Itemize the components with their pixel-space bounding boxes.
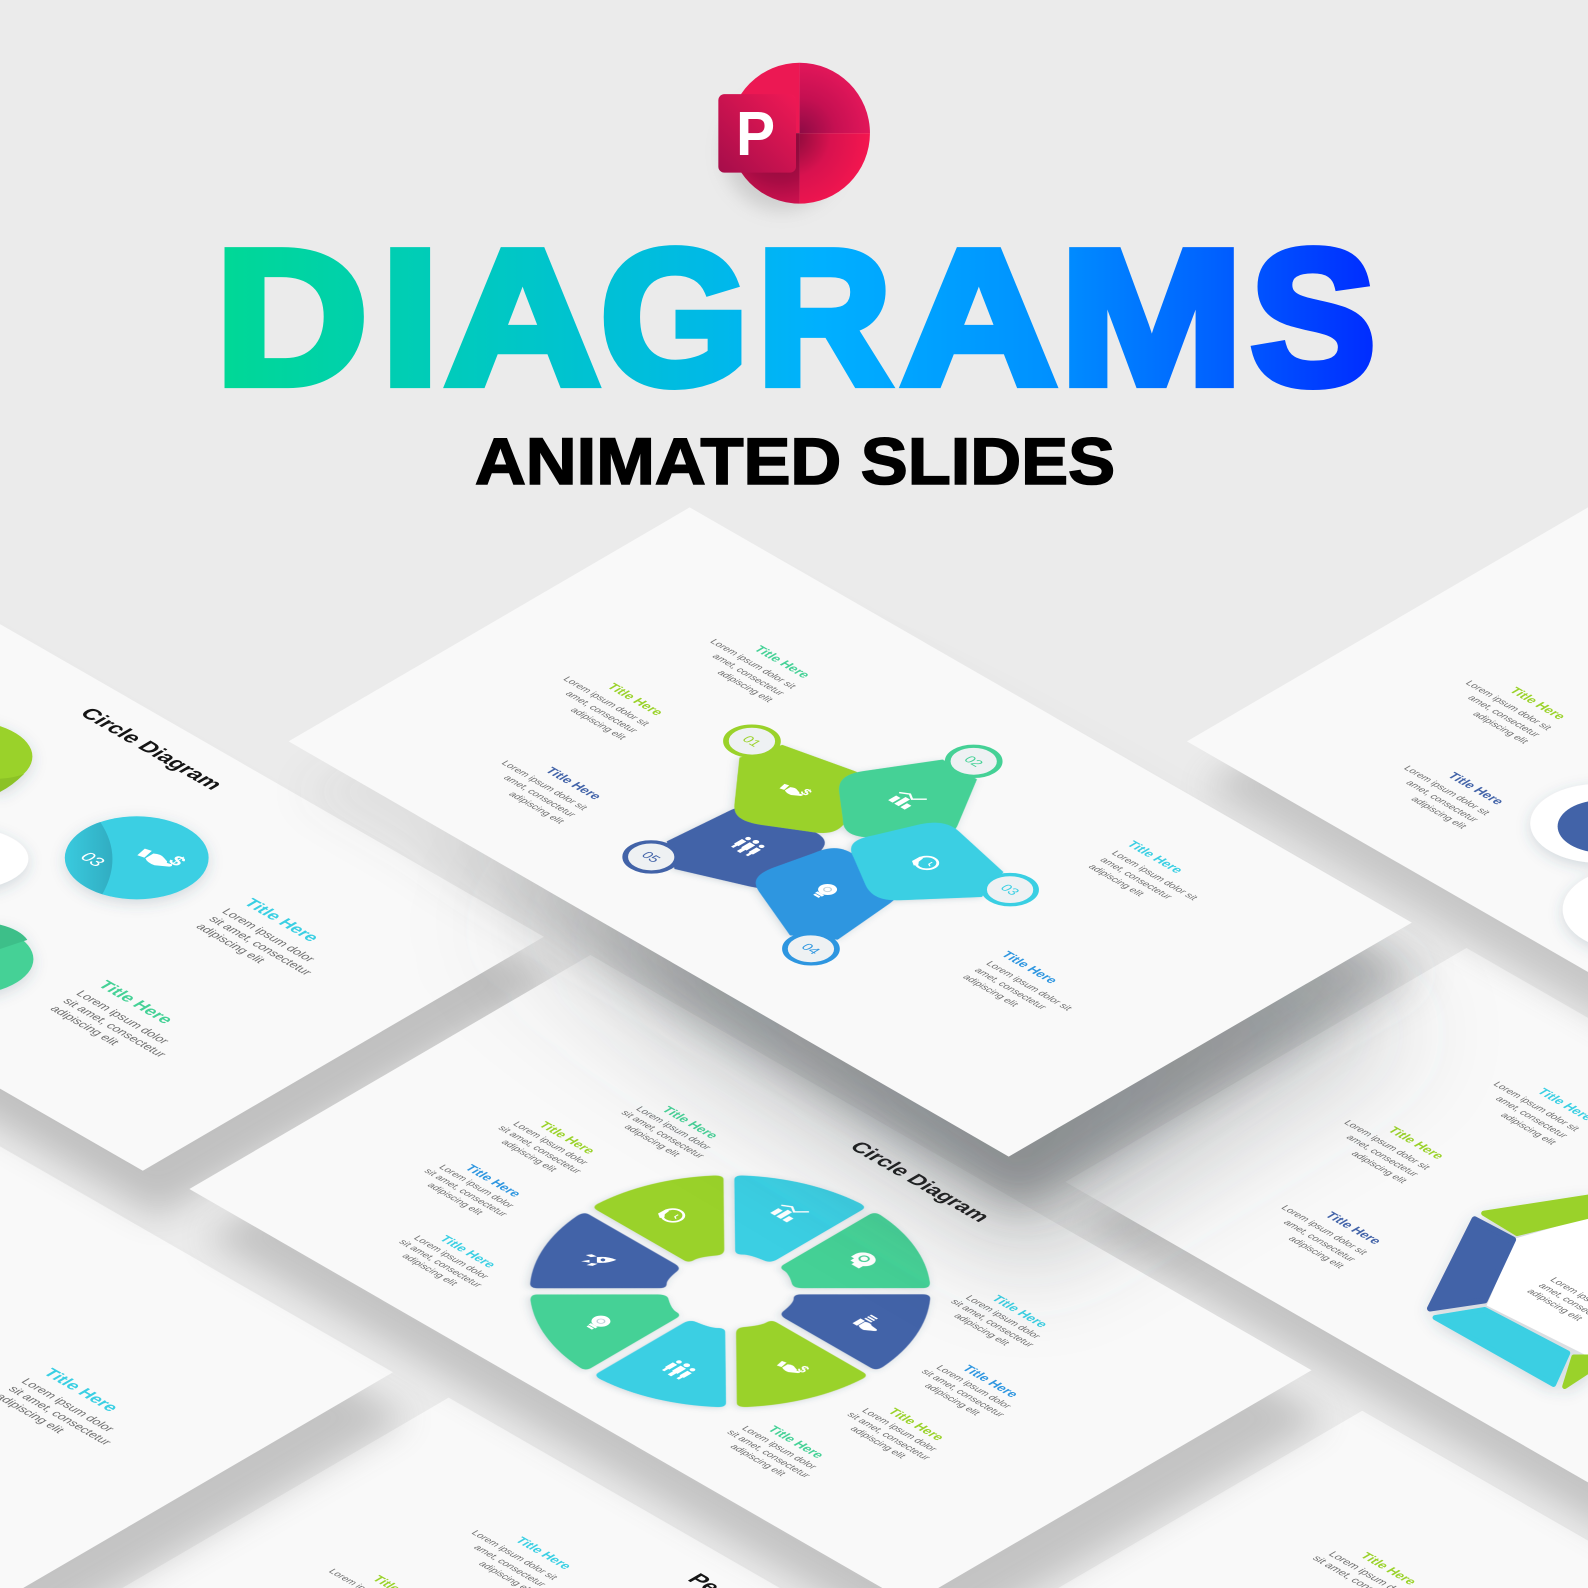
text block: cyan right: amet, consectetur: [1097, 856, 1175, 901]
text block: lime title: adipiscing elit: [1470, 710, 1531, 746]
icon: lime node: [0, 720, 32, 793]
text block: cyan right: Title Here: [988, 1293, 1052, 1330]
text block: lime title: amet, consectetur: [1343, 1134, 1421, 1179]
text block: lime title: [1318, 1108, 1451, 1185]
text block: green bottom: sit amet, consectetur: [724, 1429, 813, 1480]
chart: circle nodes: [0, 720, 209, 996]
heading: Circle Diagram: Circle Diagram: [844, 1138, 995, 1225]
text block: green top: amet, consectetur: [709, 653, 787, 698]
text block: navy title: [1377, 754, 1511, 831]
text block: cyan title: adipiscing elit: [1497, 1111, 1558, 1147]
text block: cyan title: Title Here: [240, 896, 324, 944]
chart: eight segment ring: [396, 1097, 1065, 1485]
text block: lime title: adipiscing elit: [1348, 1150, 1409, 1185]
text block: navy title: Lorem ipsum dolor sit: [1278, 1204, 1370, 1257]
icon: PowerPoint logo: [718, 63, 870, 211]
text block: lime title: [325, 1557, 436, 1588]
text block: lime top: [484, 1109, 610, 1182]
chart: hexagon diagram: [1430, 1197, 1588, 1386]
icon: coins: [852, 1313, 888, 1334]
text block: lime title: amet, consectetur: [1465, 694, 1543, 739]
text block: cyan title: [445, 1518, 579, 1588]
text block: green top: adipiscing elit: [621, 1123, 682, 1158]
icon: rocket: [577, 1249, 616, 1271]
title: DIAGRAMS: G: [600, 210, 749, 425]
text block: hexagon centre: adipiscing elit: [1524, 1288, 1585, 1323]
text block: blue right: Title Here: [998, 949, 1061, 986]
icon: ring 04: 04: [798, 941, 824, 957]
text block: cyan title: amet, consectetur: [470, 1544, 549, 1588]
text block: green bottom: Title Here: [764, 1424, 828, 1460]
text block: cyan right: [937, 1283, 1063, 1356]
text block: blue right: Lorem ipsum dolor: [933, 1364, 1014, 1411]
title: DIAGRAMS: A: [445, 210, 601, 425]
text block: navy title: adipiscing elit: [1285, 1235, 1346, 1270]
icon: ring 01: [715, 720, 789, 762]
icon: people: [729, 835, 768, 857]
text block: cyan title: Title Here: [512, 1535, 575, 1571]
text block: lime top: Lorem ipsum dolor: [510, 1120, 591, 1167]
icon: cyan node 03: [65, 816, 209, 899]
text block: cyan title: sit amet, consectetur: [206, 914, 315, 977]
panel: bottom right slide: [961, 1411, 1588, 1588]
icon: ring 01: 01: [739, 734, 765, 749]
text block: blue upper left: sit amet, consectetur: [421, 1167, 510, 1219]
text block: lime: Title Here: [604, 681, 667, 718]
text block: navy: amet, consectetur: [500, 774, 579, 819]
text block: green top: adipiscing elit: [714, 669, 775, 704]
text block: lime: adipiscing elit: [567, 706, 628, 742]
text block: cyan left: sit amet, consectetur: [396, 1238, 485, 1290]
text block: green top: Title Here: [659, 1104, 722, 1141]
text block: blue upper left: Title Here: [462, 1162, 525, 1199]
text block: green title: adipiscing elit: [47, 1004, 123, 1047]
text block: blue upper left: adipiscing elit: [424, 1182, 485, 1217]
text block: lime lower right: sit amet, consectetur: [844, 1411, 933, 1462]
panel: lower centre slide with circle diagram: [189, 955, 1327, 1588]
icon: ring 04: [774, 928, 848, 970]
text block: cyan title: [0, 1364, 149, 1455]
text block: navy title: Title Here: [1444, 770, 1508, 807]
title: DIAGRAMS: A: [900, 210, 1057, 425]
icon: phone: [909, 853, 942, 872]
text block: cyan left: Lorem ipsum dolor: [410, 1234, 491, 1281]
icon: chart: [887, 788, 927, 811]
text block: cyan right: Lorem ipsum dolor sit: [1108, 849, 1200, 902]
text block: navy: [475, 749, 609, 826]
panel: top right slide: [1187, 507, 1588, 1202]
text block: cyan right: Lorem ipsum dolor: [962, 1294, 1043, 1341]
icon: ring 05: 05: [638, 850, 664, 865]
panel: main slide with five petal diagram: [289, 507, 1432, 1267]
icon: bulb: [809, 882, 841, 900]
chart: circle nodes: [1530, 784, 1588, 952]
icon: phone: [655, 1206, 688, 1225]
title: DIAGRAMS: R: [757, 210, 892, 425]
text block: lime title: [1439, 669, 1573, 746]
icon: hand with dollar: [775, 1355, 813, 1377]
text block: lime top: adipiscing elit: [498, 1138, 559, 1174]
text block: blue right: [908, 1353, 1034, 1425]
text block: lime top: Title Here: [536, 1119, 599, 1156]
text block: cyan title: sit amet, consectetur: [5, 1384, 115, 1447]
title: DIAGRAMS: D: [215, 210, 368, 425]
text block: green top: [684, 627, 817, 704]
text block: lime title: Title Here: [1506, 685, 1570, 722]
text block: blue right: [960, 949, 1093, 1026]
text block: navy title: Title Here: [1322, 1210, 1385, 1246]
text block: blue right: sit amet, consectetur: [918, 1368, 1007, 1419]
icon: brain: [845, 1250, 881, 1270]
text block: green top: Lorem ipsum dolor: [633, 1105, 714, 1152]
text block: cyan title: Title Here: [39, 1366, 123, 1414]
text block: lime: Lorem ipsum dolor sit: [560, 675, 652, 728]
text block: cyan title: Lorem ipsum dolor sit: [1490, 1080, 1582, 1133]
title: DIAGRAMS: I: [381, 210, 440, 425]
text block: green top: sit amet, consectetur: [618, 1109, 707, 1160]
icon: ring 03: [973, 868, 1047, 911]
panel: right middle slide: [1065, 948, 1588, 1588]
icon: bulb: [582, 1313, 614, 1332]
text block: bottom right title: Title Here: [1357, 1550, 1421, 1587]
text block: green title: [47, 976, 204, 1067]
text block: cyan left: Title Here: [436, 1233, 500, 1270]
text block: lime: [537, 664, 671, 742]
text block: cyan right: adipiscing elit: [951, 1312, 1012, 1347]
text block: green title: Title Here: [94, 978, 178, 1026]
text block: navy: adipiscing elit: [506, 790, 567, 826]
text block: green title: Lorem ipsum dolor: [73, 988, 172, 1046]
icon: ring 03: 03: [997, 882, 1023, 897]
text block: navy title: Lorem ipsum dolor sit: [1401, 764, 1492, 817]
text block: lime: amet, consectetur: [562, 690, 640, 735]
text block: cyan title: [1467, 1070, 1588, 1147]
text block: cyan title: Lorem ipsum dolor: [219, 906, 318, 964]
text block: cyan title: [193, 894, 350, 985]
text block: blue right: Lorem ipsum dolor sit: [983, 960, 1074, 1013]
icon: hand with dollar: [778, 778, 816, 800]
icon: PowerPoint logo: P: [736, 100, 775, 169]
panel: left slide: [0, 522, 559, 1216]
text block: lime top: sit amet, consectetur: [495, 1124, 584, 1176]
panel: lower left slide: [0, 957, 408, 1588]
icon: ring 02: 02: [961, 754, 987, 769]
text block: green bottom: Lorem ipsum dolor: [739, 1425, 820, 1471]
text block: cyan right: [1085, 839, 1219, 916]
text block: cyan title: Lorem ipsum dolor: [18, 1376, 118, 1434]
text block: cyan left: [385, 1223, 511, 1296]
text block: green title: sit amet, consectetur: [60, 996, 170, 1059]
text block: green top: [607, 1094, 733, 1167]
text block: blue upper left: [410, 1152, 536, 1225]
text block: cyan title: adipiscing elit: [193, 922, 269, 965]
icon: ring 02: [937, 740, 1010, 783]
text block: hexagon centre: [1524, 1275, 1588, 1341]
text block: lime title: Lorem ipsum dolor sit: [1462, 679, 1554, 732]
text block: blue right: Title Here: [959, 1363, 1022, 1399]
text block: navy title: [1255, 1193, 1389, 1270]
text block: lime title: Lorem ipsum dolor sit: [1341, 1119, 1432, 1172]
text block: navy title: adipiscing elit: [1408, 795, 1469, 831]
text block: lime lower right: Title Here: [885, 1406, 948, 1443]
text block: lime lower right: [833, 1396, 959, 1468]
text block: cyan right: Title Here: [1124, 839, 1187, 875]
text block: navy: Lorem ipsum dolor sit: [498, 759, 590, 812]
text block: cyan right: sit amet, consectetur: [948, 1298, 1037, 1349]
text block: blue right: adipiscing elit: [960, 973, 1021, 1009]
text block: green top: Lorem ipsum dolor sit: [707, 638, 798, 691]
icon: white node: [0, 826, 28, 891]
panel: bottom centre slide: [48, 1398, 1186, 1588]
title: DIAGRAMS: S: [1250, 210, 1376, 425]
title: DIAGRAMS: M: [1059, 210, 1244, 425]
icon: chart: [769, 1201, 809, 1224]
text block: blue right: adipiscing elit: [921, 1382, 982, 1417]
text block: navy: Title Here: [542, 765, 605, 802]
text block: navy title: amet, consectetur: [1280, 1219, 1358, 1264]
icon: cyan node 03: 03: [76, 849, 110, 869]
text block: green top: Title Here: [751, 643, 814, 680]
text block: lime lower right: adipiscing elit: [847, 1425, 908, 1460]
text block: blue right: amet, consectetur: [971, 967, 1049, 1012]
text block: lime title: Title Here: [1385, 1125, 1448, 1161]
text block: cyan left: adipiscing elit: [399, 1252, 460, 1288]
icon: green node: [0, 923, 33, 996]
icon: ring 05: [614, 836, 688, 878]
text block: navy title: amet, consectetur: [1403, 779, 1481, 824]
text block: bottom right title: [1309, 1538, 1436, 1588]
text block: cyan right: adipiscing elit: [1085, 863, 1146, 898]
text block: cyan title: Lorem ipsum dolor sit: [468, 1529, 560, 1582]
text block: lime lower right: Lorem ipsum dolor: [859, 1407, 940, 1454]
text block: green bottom: adipiscing elit: [727, 1443, 788, 1478]
chart: five petal diagram: [565, 666, 1140, 999]
text block: green bottom: [713, 1413, 839, 1486]
text block: blue upper left: Lorem ipsum dolor: [436, 1163, 517, 1210]
text block: cyan title: amet, consectetur: [1492, 1095, 1570, 1140]
icon: people: [660, 1358, 699, 1381]
subtitle: ANIMATED SLIDES: ANIMATED SLIDES: [475, 424, 1115, 498]
heading: Circle Diagram: Circle Diagram: [75, 704, 228, 793]
